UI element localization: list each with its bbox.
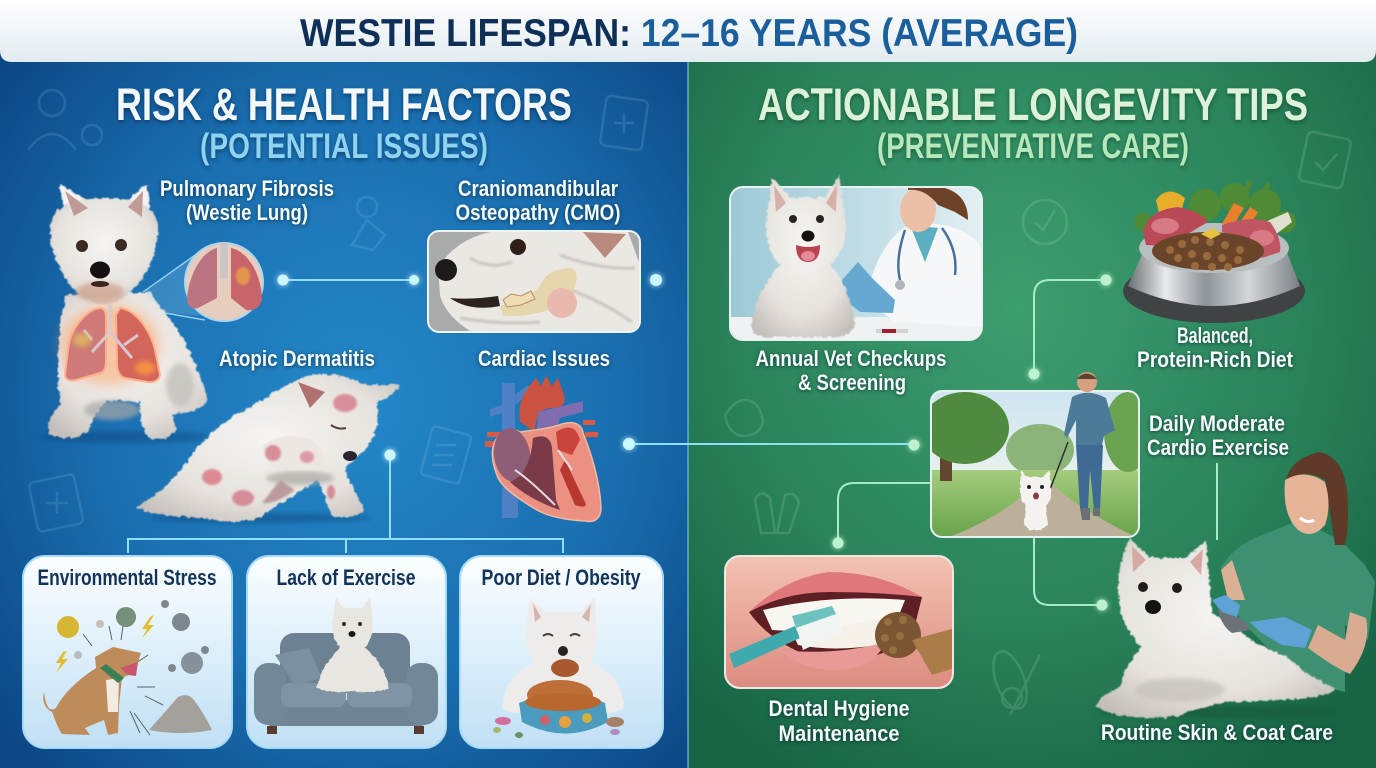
- illustration: heart: [485, 376, 601, 521]
- icon: faint background icons: [28, 90, 1352, 715]
- label: dental hygiene: [768, 696, 910, 746]
- illustration: groomed westie: [1095, 538, 1335, 718]
- label: CMO: [456, 176, 620, 225]
- heading: risk and health factors: (POTENTIAL ISSUES): [200, 127, 488, 166]
- label: CMO: Craniomandibular: [458, 176, 618, 201]
- card: poor diet: Poor Diet / Obesity: [482, 565, 641, 590]
- label: CMO: Osteopathy (CMO): [456, 200, 620, 225]
- title banner: [0, 0, 1376, 62]
- label: balanced diet: Balanced,: [1177, 323, 1253, 348]
- heading: risk and health factors: [116, 79, 572, 166]
- card: CMO image: [428, 231, 640, 332]
- icon: allergens: [56, 600, 209, 735]
- illustration: dust pile: [149, 695, 212, 733]
- connector lines left: [128, 280, 914, 553]
- illustration: food bowl: [1123, 180, 1305, 323]
- label: cardiac issues: Cardiac Issues: [478, 346, 610, 371]
- label: dental hygiene: Dental Hygiene: [768, 696, 910, 721]
- illustration: sofa: [254, 633, 438, 734]
- connector lines right: [838, 280, 1217, 605]
- illustration: westie at vet: [751, 175, 855, 337]
- lungs on chest: [60, 305, 160, 385]
- title: WESTIE LIFESPAN: 12–16 YEARS (AVERAGE): [300, 12, 1078, 55]
- card: dental: [725, 556, 955, 688]
- label: vet checkups: & Screening: [798, 370, 906, 395]
- card: poor diet: [460, 556, 663, 748]
- illustration: groomer: [1221, 452, 1375, 692]
- label: vet checkups: Annual Vet Checkups: [756, 346, 946, 371]
- label: pulmonary fibrosis: Pulmonary Fibrosis: [160, 176, 334, 201]
- centre divider: [687, 62, 689, 768]
- label: dental hygiene: Maintenance: [778, 721, 900, 746]
- illustration: walking man and dog: [1020, 372, 1115, 530]
- illustration: fat westie: [502, 597, 624, 713]
- label: vet checkups: [756, 346, 946, 395]
- illustration: westie on sofa: [317, 597, 389, 692]
- heading: actionable longevity tips: [758, 79, 1308, 166]
- illustration: coughing dog: [43, 647, 141, 735]
- illustration: lung magnifier: [143, 242, 263, 321]
- label: pulmonary fibrosis: (Westie Lung): [186, 200, 308, 225]
- label: daily exercise: Cardio Exercise: [1147, 435, 1289, 460]
- card: lack of exercise: [247, 556, 446, 748]
- card: walking in the park: [921, 391, 1152, 537]
- card: environmental stress: [23, 556, 232, 748]
- heading: risk and health factors: RISK & HEALTH FACTORS: [116, 79, 572, 130]
- panel: risk background: [0, 0, 688, 768]
- card: environmental stress: Environmental Stress: [38, 565, 216, 590]
- illustration: food bowl: [493, 680, 624, 738]
- label: daily exercise: Daily Moderate: [1149, 411, 1285, 436]
- illustration: dog with dermatitis: [137, 375, 400, 523]
- label: skin and coat care: Routine Skin & Coat Care: [1101, 720, 1333, 745]
- card: lack of exercise: Lack of Exercise: [276, 565, 416, 590]
- illustration: westie with lungs: [40, 184, 210, 443]
- panel: longevity background: [688, 0, 1376, 768]
- label: pulmonary fibrosis: [160, 176, 334, 225]
- label: balanced diet: [1137, 323, 1294, 372]
- label: daily exercise: [1147, 411, 1289, 460]
- card: vet checkups: [730, 187, 985, 340]
- label: atopic dermatitis: Atopic Dermatitis: [219, 346, 375, 371]
- heading: actionable longevity tips: (PREVENTATIVE CARE): [877, 127, 1189, 166]
- connector dots: [278, 274, 1112, 610]
- label: balanced diet: Protein-Rich Diet: [1137, 347, 1294, 372]
